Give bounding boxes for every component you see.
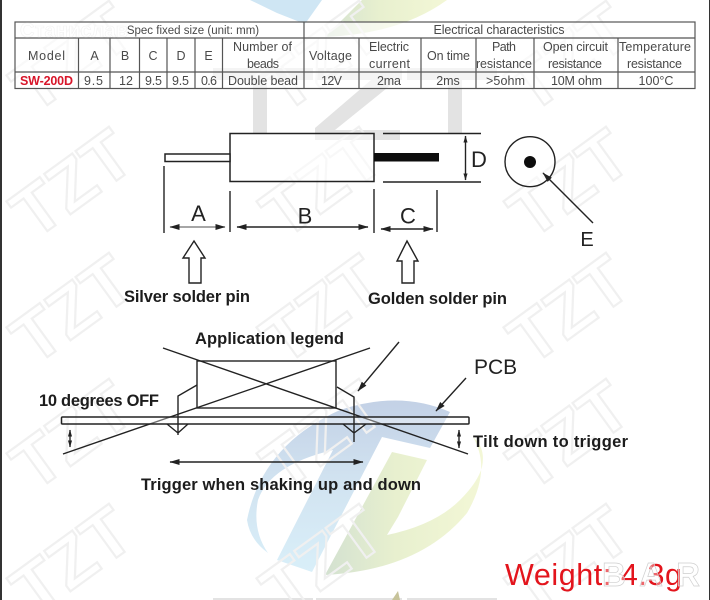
- legend heading: Application legend: [195, 330, 344, 348]
- dimension B: [237, 204, 368, 228]
- label: PCB: PCB: [474, 356, 517, 379]
- specification table: [15, 20, 695, 88]
- weight callout: Weight: 4.3g: [505, 558, 682, 592]
- dimension B: B: [298, 204, 312, 228]
- table data row: 100°C: [639, 74, 673, 88]
- table column headers: beads: [247, 57, 279, 71]
- table data row: 12V: [321, 74, 343, 88]
- right solder lead: [337, 387, 366, 442]
- dimension A: [170, 201, 225, 227]
- background TZT watermarks: TZT: [0, 114, 147, 253]
- table data row: 0.6: [201, 74, 217, 88]
- background TZT watermarks: TZT: [494, 366, 644, 505]
- table column headers: Path: [492, 40, 516, 54]
- label: 10 degrees off: 10 degrees OFF: [39, 392, 159, 410]
- dimension extension lines: [164, 134, 481, 233]
- table data row: 9.5: [84, 74, 103, 88]
- table data row: >5ohm: [486, 74, 525, 88]
- dimension D: [466, 136, 487, 180]
- overlay stamp mark: BAR: [602, 556, 700, 593]
- table column headers: [28, 40, 691, 71]
- end view with dimension E: E: [580, 229, 594, 251]
- label: golden solder pin: Golden solder pin: [368, 290, 507, 308]
- table data row: 9.5: [145, 74, 162, 88]
- switch dimension drawing: [124, 134, 594, 308]
- table column headers: resistance: [627, 57, 682, 71]
- table data row: 12: [119, 74, 133, 88]
- switch body: [230, 134, 374, 182]
- background logo: centre: [247, 400, 483, 575]
- table data row: 10M ohm: [551, 74, 602, 88]
- table column headers: resistance: [476, 57, 532, 71]
- background TZT watermarks: TZT: [247, 366, 397, 505]
- table data row: Double bead: [228, 74, 298, 88]
- table column headers: On time: [427, 49, 470, 63]
- table column headers: Electric: [369, 40, 409, 54]
- table data row: 2ma: [377, 74, 401, 88]
- table column headers: Open circuit: [543, 40, 609, 54]
- table column headers: B: [121, 49, 129, 63]
- end view with dimension E: [505, 137, 594, 251]
- background TZT watermarks: TZT: [247, 240, 397, 379]
- application legend drawing: [39, 330, 629, 494]
- label: silver solder pin: Silver solder pin: [124, 288, 250, 306]
- table data row: [20, 74, 673, 88]
- arrow: lead pointer: [358, 342, 399, 391]
- arrow: shake span: [170, 461, 363, 463]
- table column headers: E: [204, 49, 213, 63]
- table column headers: D: [176, 49, 186, 63]
- dimension D: D: [471, 147, 487, 172]
- arrow: golden pin: [397, 241, 418, 283]
- background TZT watermarks: TZT: [0, 240, 147, 379]
- table column headers: Number of: [233, 40, 293, 54]
- table data row: 2ms: [436, 74, 460, 88]
- label: tilt down to trigger: Tilt down to trigger: [473, 433, 629, 451]
- background TZT watermarks: TZT: [494, 240, 644, 379]
- dimension A: A: [191, 201, 206, 226]
- background large grey letters: [213, 68, 497, 600]
- table column headers: current: [369, 57, 411, 71]
- table column headers: C: [148, 49, 158, 63]
- left solder lead: [167, 385, 197, 435]
- table group headers: Electrical characteristics: [434, 23, 564, 37]
- dimension C: [381, 204, 433, 229]
- table group headers: [127, 23, 564, 37]
- arrow: silver pin: [183, 241, 205, 283]
- background logo: top: [250, 0, 447, 37]
- table column headers: Voltage: [309, 49, 352, 63]
- arrow: left tilt gap: [69, 430, 71, 447]
- table group headers: Spec fixed size (unit: mm): [127, 25, 259, 37]
- background TZT watermarks: TZT: [0, 366, 147, 505]
- arrow: PCB pointer: [436, 378, 466, 411]
- switch box: [197, 361, 336, 408]
- tilt lines: [63, 348, 468, 454]
- overlay stamp text: Станислав: [20, 20, 128, 42]
- label: trigger when shaking: Trigger when shaking up and down: [141, 476, 421, 494]
- golden pin: [374, 153, 439, 162]
- table column headers: A: [90, 49, 99, 63]
- arrow: right tilt gap: [458, 430, 460, 448]
- background TZT watermarks: TZT: [247, 114, 397, 253]
- table column headers: resistance: [548, 57, 602, 71]
- PCB board: [62, 417, 469, 424]
- background TZT watermarks: TZT: [494, 114, 644, 253]
- silver pin: [165, 154, 230, 162]
- table column headers: Temperature: [619, 40, 691, 54]
- dimension C: C: [400, 204, 416, 228]
- table data row: 9.5: [172, 74, 189, 88]
- table column headers: Model: [28, 49, 65, 63]
- table data row: SW-200D: [20, 74, 73, 88]
